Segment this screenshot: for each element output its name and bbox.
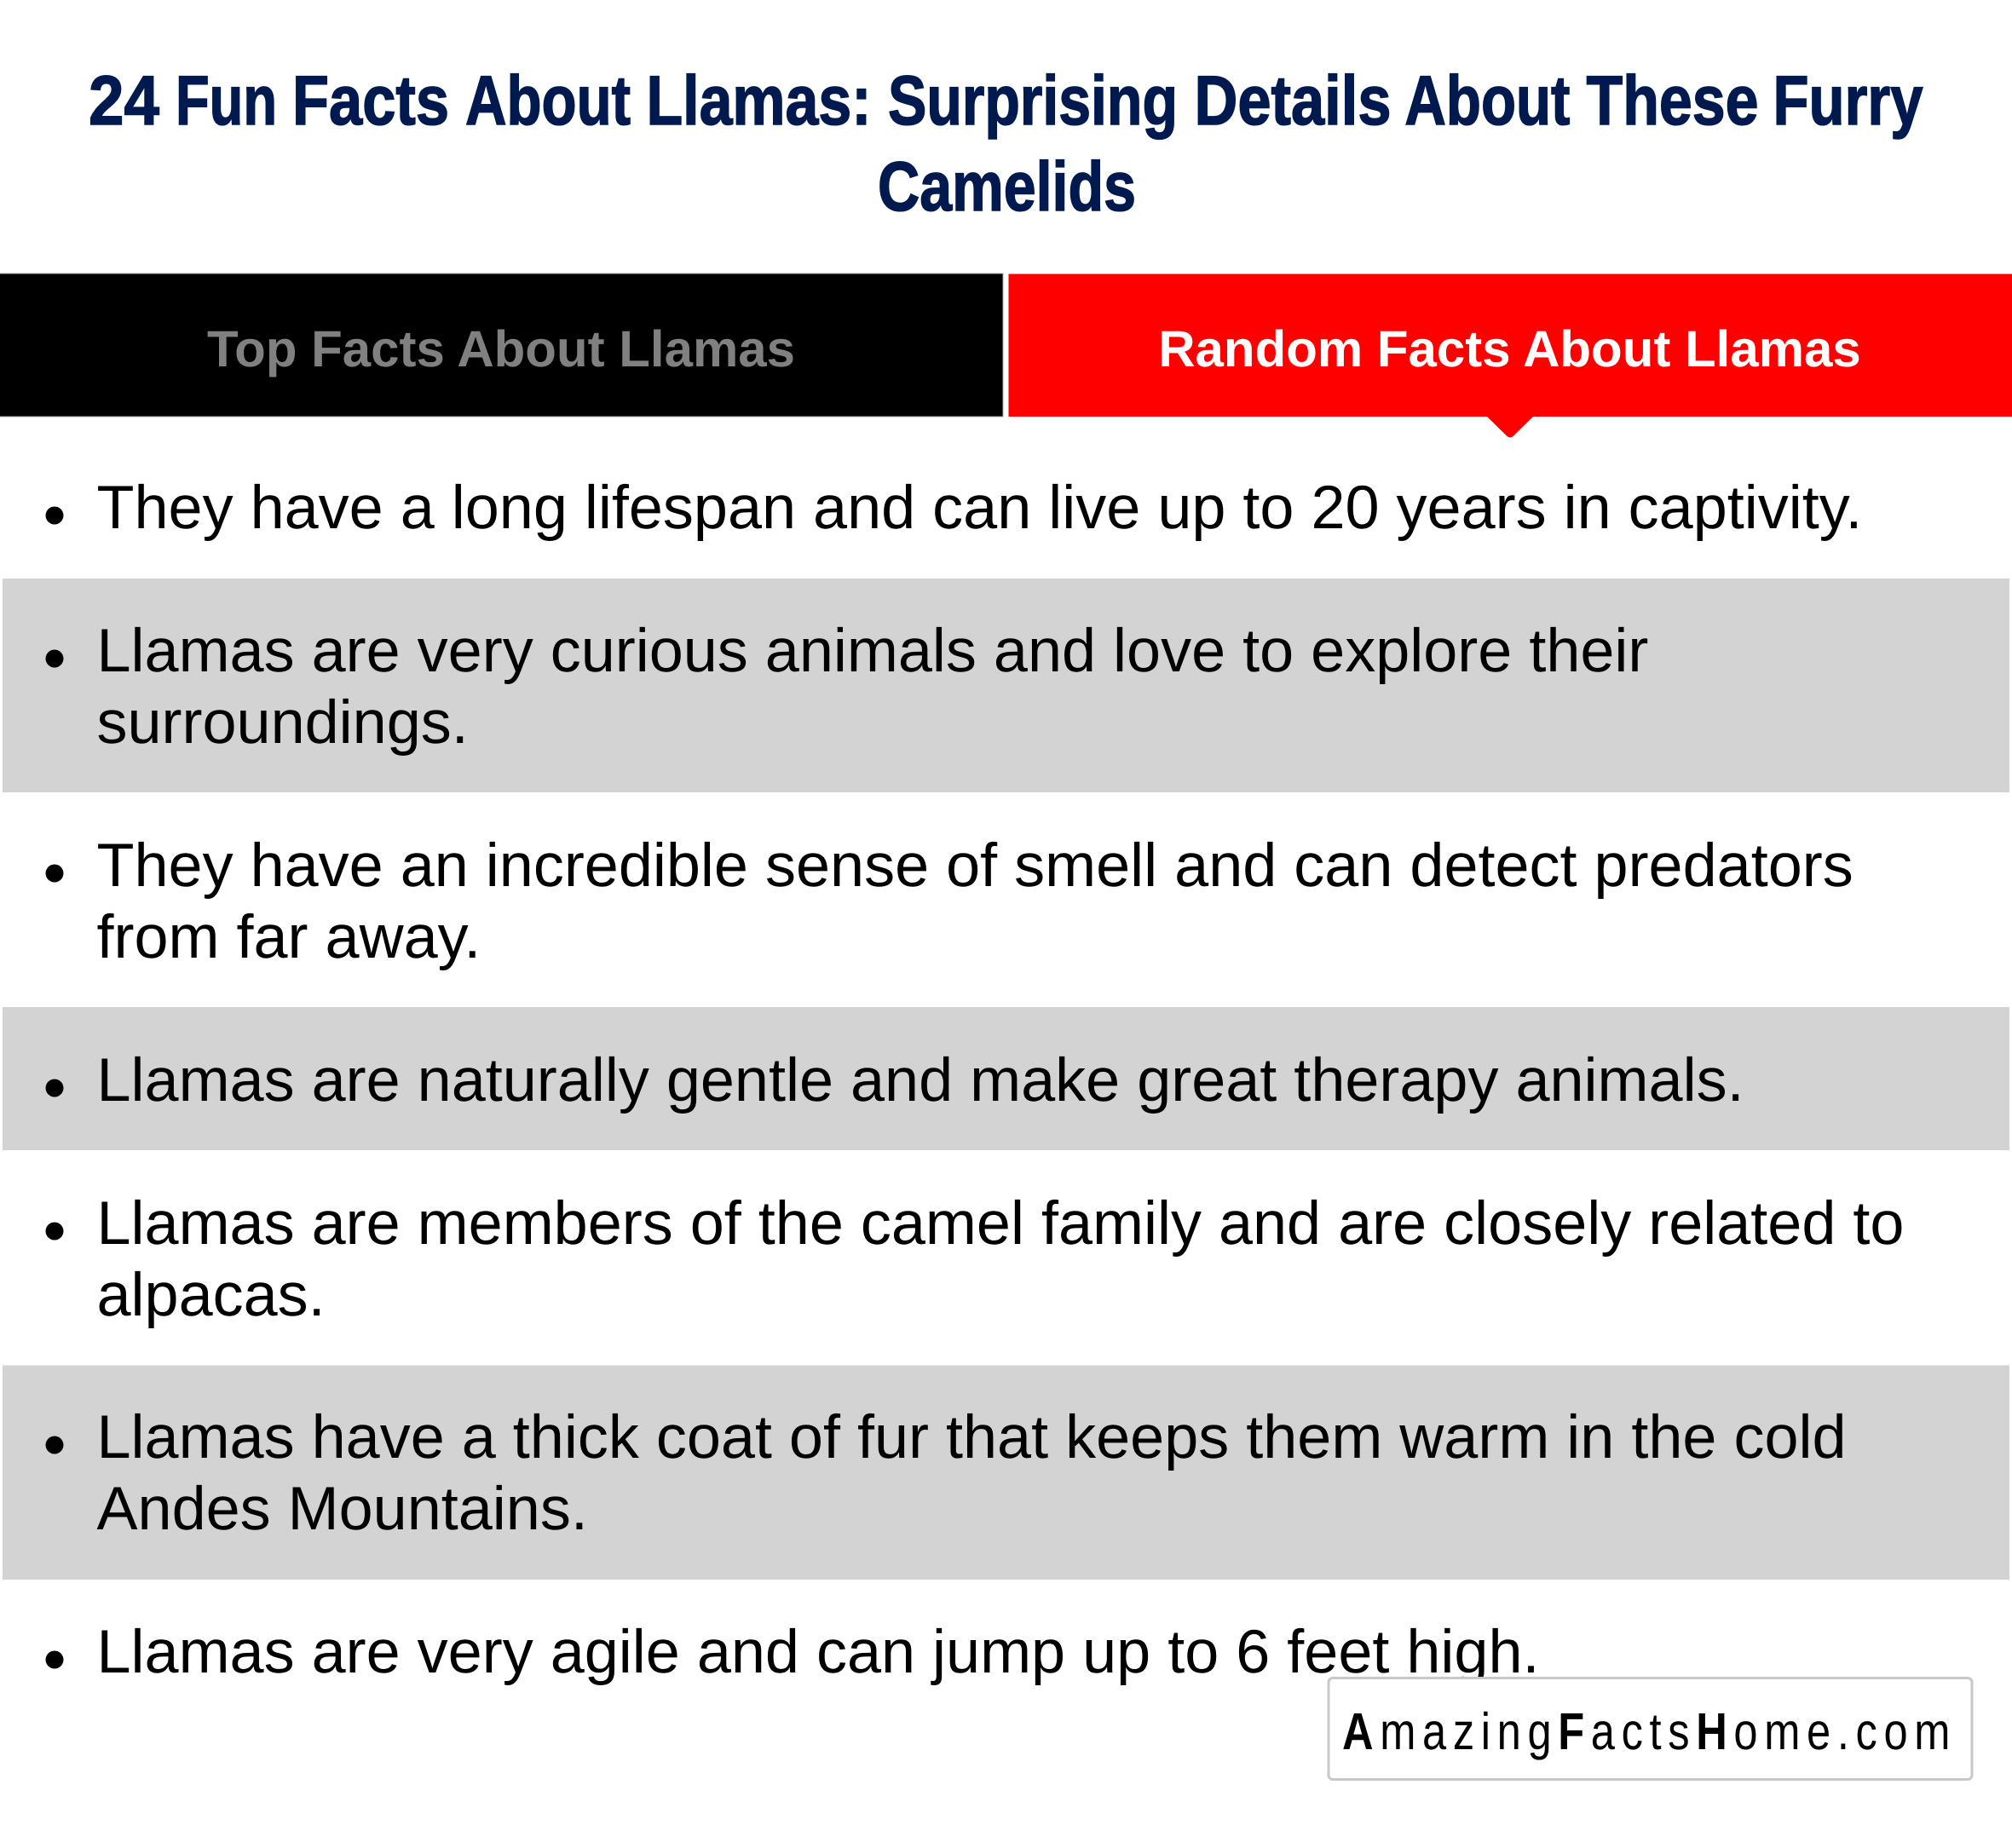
tab: random facts (active) bbox=[1009, 274, 2012, 438]
fact 2 bbox=[3, 579, 2009, 792]
fact 6: Llamas have a thick coat of fur that keeps them warm in the cold bbox=[97, 1403, 1847, 1471]
title: Facts bbox=[292, 62, 449, 140]
fact 3: They have an incredible sense of smell and can detect predators bbox=[97, 832, 1853, 900]
fact 2: surroundings. bbox=[97, 688, 469, 757]
title: About bbox=[1404, 62, 1570, 140]
fact 5: Llamas are members of the camel family and are closely related to bbox=[97, 1189, 1904, 1258]
fact 3 bbox=[46, 832, 1853, 971]
fact 5: alpacas. bbox=[97, 1261, 326, 1329]
fact 2: Llamas are very curious animals and love to explore their bbox=[97, 617, 1648, 685]
title: Llamas: bbox=[646, 62, 871, 140]
title: Fun bbox=[176, 62, 277, 140]
fact 6: Andes Mountains. bbox=[97, 1475, 588, 1543]
title: About bbox=[465, 62, 631, 140]
fact 5 bbox=[46, 1189, 1904, 1329]
title: Details bbox=[1195, 62, 1391, 140]
fact 3: from far away. bbox=[97, 903, 481, 971]
title bbox=[89, 62, 1923, 226]
fact 4: Llamas are naturally gentle and make great therapy animals. bbox=[97, 1046, 1744, 1114]
fact 6 bbox=[3, 1365, 2009, 1580]
watermark: AmazingFactsHome.com: AmazingFactsHome.com bbox=[1342, 1702, 1957, 1760]
fact 4 bbox=[3, 1007, 2009, 1150]
tab: random facts (active): Random Facts About Llamas bbox=[1158, 320, 1861, 377]
title: Camelids bbox=[878, 148, 1136, 226]
fact 1: They have a long lifespan and can live up to 20 years in captivity. bbox=[97, 474, 1862, 542]
title: Furry bbox=[1773, 62, 1923, 140]
title: These bbox=[1587, 62, 1759, 140]
watermark: AmazingFactsHome.com bbox=[1329, 1678, 1972, 1779]
fact 7: Llamas are very agile and can jump up to 6 feet high. bbox=[97, 1618, 1540, 1686]
tab: top facts (inactive) bbox=[0, 273, 1003, 417]
tab: top facts (inactive): Top Facts About Llamas bbox=[207, 320, 795, 377]
title: 24 bbox=[89, 62, 159, 140]
title: Surprising bbox=[888, 62, 1178, 140]
